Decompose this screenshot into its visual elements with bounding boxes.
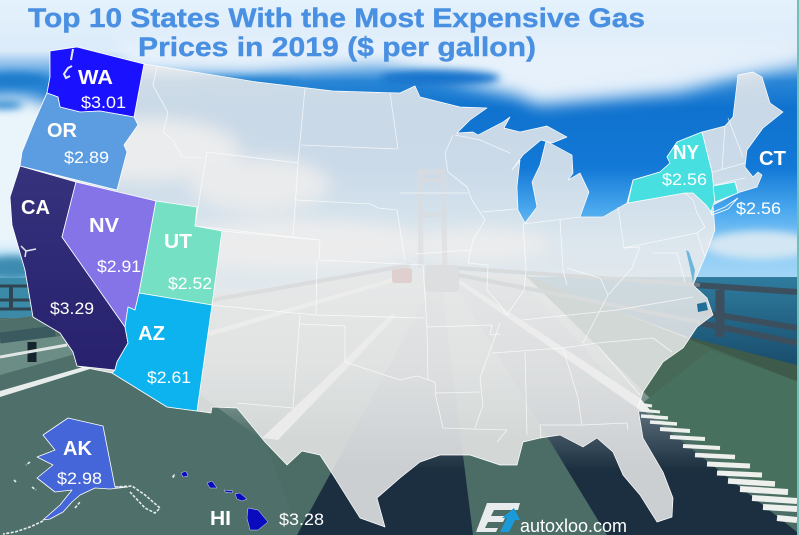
state: Oregon: OR xyxy=(47,120,78,142)
white road stripes xyxy=(0,367,90,397)
state: Alaska: $2.98 xyxy=(57,469,102,488)
state: Arizona xyxy=(112,293,212,411)
state: Alaska: AK xyxy=(63,438,93,460)
state: New York: NY xyxy=(673,142,700,164)
state: Oregon xyxy=(20,93,138,190)
state: Utah: UT xyxy=(164,231,192,253)
state: Arizona: $2.61 xyxy=(147,368,191,387)
state: Hawaii xyxy=(172,471,324,530)
water inlets xyxy=(686,250,708,312)
state borders xyxy=(153,67,745,442)
state: Nevada: $2.91 xyxy=(97,257,141,276)
state: Alaska xyxy=(3,418,160,534)
state: New York xyxy=(628,132,738,215)
bridge tower xyxy=(420,172,445,268)
logo: autoxloo.com xyxy=(476,503,627,535)
title: Prices in 2019 ($ per gallon) xyxy=(138,32,536,62)
state: Utah xyxy=(139,201,222,305)
state: Nevada: NV xyxy=(89,215,120,237)
state: Nevada xyxy=(62,182,156,327)
state: Connecticut: CT xyxy=(759,148,786,170)
state: Washington: WA xyxy=(78,67,113,89)
state: Arizona: AZ xyxy=(138,323,165,345)
state: Washington: $3.01 xyxy=(81,93,126,112)
white dashed edge stripe xyxy=(638,404,797,520)
asphalt xyxy=(0,270,799,535)
state: Hawaii: HI xyxy=(210,508,231,530)
state: Hawaii: $3.28 xyxy=(279,510,324,529)
title xyxy=(28,3,645,62)
state: Connecticut: $2.56 xyxy=(736,199,781,218)
sea xyxy=(520,277,799,367)
state: Utah: $2.52 xyxy=(168,274,212,293)
title: Top 10 States With the Most Expensive Gas xyxy=(28,3,645,33)
vehicles xyxy=(392,268,412,283)
state: California: CA xyxy=(21,197,50,219)
left guard rail xyxy=(0,265,410,362)
state: Connecticut xyxy=(713,148,786,218)
state: California xyxy=(10,166,128,370)
state: California: $3.29 xyxy=(50,299,94,318)
state: Oregon: $2.89 xyxy=(64,148,109,167)
state: Washington xyxy=(47,47,144,117)
state: New York: $2.56 xyxy=(662,170,707,189)
right guard rail xyxy=(458,268,797,343)
